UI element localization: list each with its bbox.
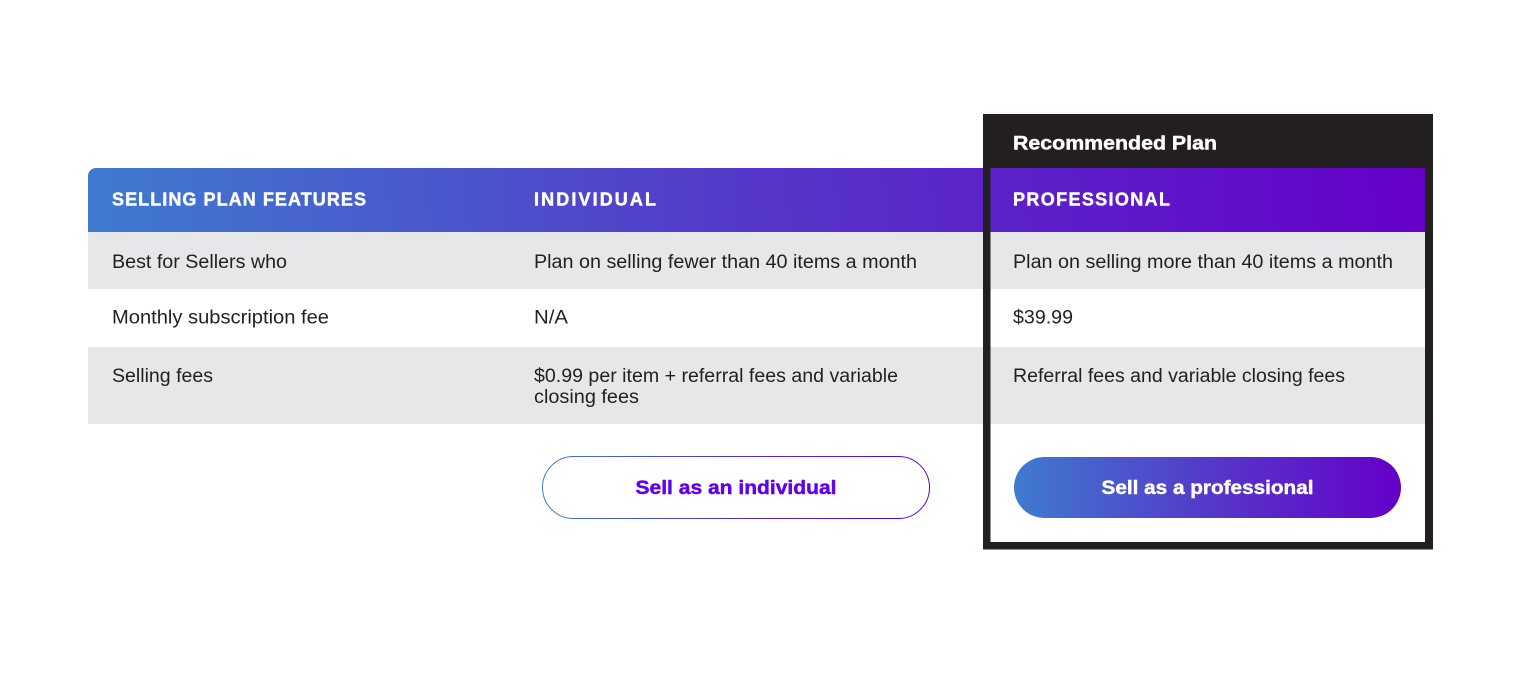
row: selling fees: Selling fees <box>112 366 213 387</box>
recommended plan frame <box>983 114 1433 550</box>
button: sell as a professional: Sell as a professional <box>1102 477 1314 499</box>
row: best for sellers who: Best for Sellers who <box>112 252 287 273</box>
heading: professional: PROFESSIONAL <box>1013 190 1170 210</box>
row: best for sellers who <box>88 232 1425 289</box>
row: best for sellers who: Plan on selling fewer than 40 items a month <box>534 252 917 273</box>
button: sell as a professional <box>1014 457 1401 518</box>
heading: individual: INDIVIDUAL <box>534 190 656 210</box>
row: selling fees <box>88 347 1425 424</box>
row: selling fees: closing fees <box>534 387 639 408</box>
heading: selling plan features: SELLING PLAN FEATURES <box>112 190 366 210</box>
row: selling fees: Referral fees and variable closing fees <box>1013 366 1345 387</box>
row: monthly subscription fee: $39.99 <box>1013 308 1073 328</box>
row: selling fees: $0.99 per item + referral fees and variable <box>534 366 898 387</box>
table header bar <box>88 168 1425 232</box>
label: recommended plan: Recommended Plan <box>1013 132 1217 154</box>
button: sell as an individual: Sell as an individual <box>636 477 836 499</box>
row: best for sellers who: Plan on selling more than 40 items a month <box>1013 252 1393 273</box>
row: monthly subscription fee: Monthly subscription fee <box>112 308 329 328</box>
row: monthly subscription fee <box>88 289 1425 347</box>
button: sell as an individual <box>542 456 930 518</box>
row: monthly subscription fee: N/A <box>534 308 568 328</box>
